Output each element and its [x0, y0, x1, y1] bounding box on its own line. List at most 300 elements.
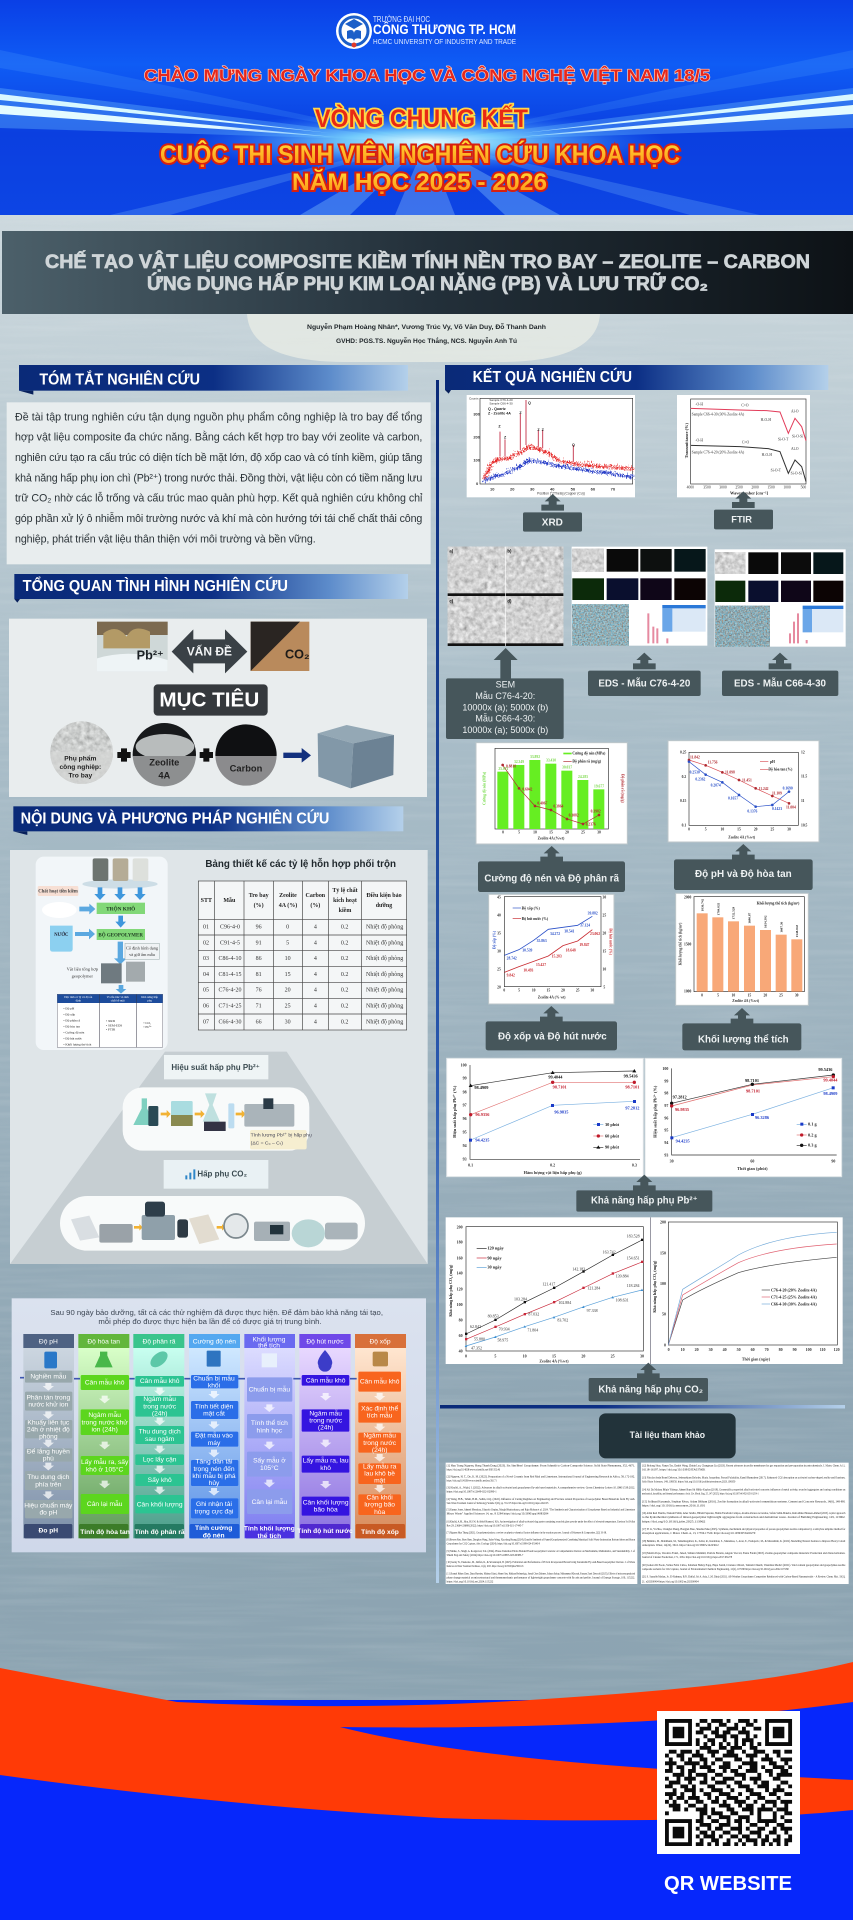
chart: CO2 adsorption versus zeolite: 5 [494, 1354, 496, 1359]
panel: test procedures: Sau 90 ngày bảo dưỡng, tất cả các thử nghiệm đã được thực hiện. Để đảm bảo khả năng tái tạo, [50, 1308, 383, 1317]
table: mix design: 66 [256, 1019, 262, 1025]
chart: CO2 adsorption versus zeolite: 58.975 [497, 1337, 508, 1342]
column: porosity: Tính độ xốp [361, 1528, 399, 1536]
chart: Pb adsorption versus time: 93 [664, 1152, 668, 1157]
chart: CO2 adsorption versus time: 100 [660, 1281, 666, 1286]
table: mix design: 4 [314, 940, 317, 946]
column: compressive strength: hủy [209, 1479, 220, 1487]
chart: porosity and absorption: 5 [603, 985, 605, 989]
column: disintegration: Lọc lấy cặn [143, 1455, 177, 1464]
column: pH [23, 1334, 74, 1538]
column: pH: đo pH [39, 1510, 57, 1517]
label: EDS C66-4-30: EDS - Mẫu C66-4-30 [734, 678, 826, 689]
chart: CO2 adsorption versus zeolite: 100 [457, 1302, 463, 1307]
column: compressive strength: Ghi nhận tải [196, 1501, 232, 1508]
references: left column: Res 29, 23664-23688 (2022). https://doi.org/10.1007/s11356-021-17445-7 [447, 1523, 524, 1528]
chart: XRD: Sample C66-4-30 [489, 402, 513, 406]
table: mix design: 06 [203, 1003, 209, 1009]
column: porosity [355, 1334, 406, 1538]
chart: CO2 adsorption versus time: C71-4-25 (25% Zeolite 4A) [771, 1294, 817, 1299]
chart: porosity and absorption: Độ xốp (%) [492, 930, 496, 949]
chart: strength and disintegration: 15 [549, 831, 553, 835]
chart: strength and disintegration: 10 [533, 831, 537, 835]
image: EDS C76-4-20 [572, 547, 707, 646]
flowchart: synthesis: • Độ hút nước [63, 1036, 83, 1040]
references: right column: https://doi.org/10.1016/j.cemconres.2016.11.001 [642, 1503, 706, 1507]
references: left column: [11] Samad Hokm Chen, Dana Hussien, Mahyar Kiani, Ahmet Sen, Hakkan Helmeolgu, Jamal Chen Dalmes, Sulyan Sahay, Mohammad Khosah, Farzam Zarei Davoodi (2025). Effects of microencapsulated [447, 1572, 635, 1577]
process: Pb adsorption [123, 1087, 312, 1151]
chart: CO2 adsorption versus zeolite: 25 [611, 1354, 615, 1359]
chart: CO2 adsorption versus zeolite: 140 [457, 1271, 463, 1276]
table: mix design: C76-4-20 [219, 988, 241, 994]
chart: pH and solubility: 11.004 [786, 805, 796, 809]
section divider [440, 1405, 845, 1408]
chart: pH and solubility: 5 [705, 828, 707, 832]
label: CO2 adsorption: Hấp phụ CO₂ [197, 1170, 247, 1179]
references: right column: 16118-16197. https://doi.org/10.1039/D3TA03760K [642, 1468, 706, 1472]
chart: pH and solubility: 0.25 [680, 750, 687, 754]
column: disintegration [133, 1334, 185, 1538]
column: compressive strength: độ nén [203, 1533, 225, 1540]
chart: FTIR: -O-H [695, 439, 703, 443]
table: mix design: 4 [314, 1019, 317, 1025]
chart: porosity and absorption: 9.842 [507, 974, 515, 978]
table: mix design: 02 [203, 940, 209, 946]
column: water absorption: khô [320, 1465, 331, 1472]
chart: strength and disintegration: Cường độ nén (MPa) [483, 771, 487, 805]
chart: CO2 adsorption versus zeolite: 80.853 [488, 1313, 499, 1318]
column: water absorption: Cân mẫu khô [306, 1375, 346, 1384]
chart: Pb adsorption versus time: 96 [664, 1115, 668, 1120]
table: mix design [198, 881, 407, 1030]
chart: Pb adsorption versus time: Hiệu suất hấp phụ Pb²⁺ (%) [653, 1085, 658, 1138]
column: solubility: ion (24h) [92, 1427, 118, 1434]
column: compressive strength: trọng cực đại [195, 1509, 234, 1516]
column: disintegration: sau ngâm [145, 1436, 175, 1443]
flowchart: synthesis: Vi cấu trúc và tính [107, 995, 129, 999]
chart: strength and disintegration: 32.349 [514, 760, 524, 764]
flowchart: synthesis: • Pb²⁺ [143, 1025, 152, 1029]
chart: Pb adsorption versus dose: 100 [461, 1062, 467, 1067]
chart: porosity and absorption: 15.427 [536, 963, 546, 967]
chart: porosity and absorption: 39.882 [588, 911, 598, 915]
label: SEM: 10000x (a); 5000x (b) [462, 725, 548, 735]
references: left column: Sulo Waste Treatment Journal of Technology Volume 3(10), pp. 716-725 https://doi.org/10.1016/j.jclepro.2022.05 [447, 1501, 549, 1506]
trapezoid backdrop [10, 1052, 428, 1264]
objective label: MỤC TIÊU [159, 687, 259, 711]
references: left column: https://doi.org/10.1007/s12649-022-02090-1 [447, 1490, 497, 1494]
chart: Pb adsorption versus dose: 60 phút [605, 1133, 620, 1138]
chart: strength and disintegration: 25 [581, 831, 585, 835]
column: bulk density: Tính thể tích [251, 1419, 288, 1427]
chart: pH and solubility: 0.2530 [690, 770, 700, 774]
chart: strength and disintegration: Zeolite 4A (%wt) [538, 837, 565, 841]
material: zeolite: 4A [158, 770, 171, 780]
chart: porosity and absorption: 30 [603, 895, 606, 899]
flowchart: synthesis: chất bề mặt [111, 998, 125, 1002]
chart: CO2 adsorption versus time: 120 [834, 1347, 840, 1352]
label: SEM: 10000x (a); 5000x (b) [462, 702, 548, 712]
chart: strength and disintegration: 0.3982 [591, 810, 601, 814]
column: disintegration: Cân mẫu khô [140, 1376, 180, 1385]
chart: Pb adsorption versus dose: 97 [463, 1103, 467, 1108]
column: pH: Thu dung dịch [27, 1474, 70, 1481]
chart: pH and solubility: Độ hòa tan (%) [768, 768, 793, 772]
chart: porosity and absorption: 30 [497, 950, 501, 954]
column: pH: nước khử ion [28, 1401, 69, 1409]
label: CO2 capacity: Khả năng hấp phụ CO₂ [598, 1384, 703, 1396]
chart: FTIR: C=O [741, 404, 749, 408]
column: disintegration: Cân khối lượng [137, 1499, 183, 1508]
chart: porosity and absorption: 5 [518, 989, 520, 993]
column: porosity: hòa [374, 1509, 386, 1516]
chart: CO2 adsorption versus time: 40 [723, 1347, 727, 1352]
chart: strength and disintegration: 30.037 [562, 766, 572, 770]
column: water absorption: Độ hút nước [306, 1338, 344, 1345]
table: mix design: 4A (%) [279, 902, 297, 909]
chart: XRD: 50 [571, 486, 576, 491]
column: compressive strength: mặt cắt [203, 1409, 225, 1418]
column: pH: Đo pH [39, 1527, 58, 1534]
label: pH [674, 859, 813, 890]
chart: FTIR: 2500 [735, 486, 743, 490]
chart: strength and disintegration: 0.2376 [586, 823, 596, 827]
material: fly ash: Tro bay [68, 772, 92, 779]
chart: bulk density: 1732.529 [732, 907, 736, 919]
chart: Pb adsorption versus time: 94.4235 [676, 1138, 690, 1143]
chart: Pb adsorption versus time: 98 [664, 1091, 668, 1096]
chart: strength and disintegration: 0.8818 [506, 764, 516, 768]
chart: strength and disintegration: 0.3864 [553, 804, 564, 808]
chart: bulk density: Zeolite 4A (%wt) [732, 999, 760, 1003]
column: disintegration: Tính độ phân rã [135, 1529, 185, 1536]
flowchart: synthesis: • Độ pH [63, 1006, 75, 1010]
column: compressive strength: Chuẩn bị mẫu [193, 1373, 235, 1382]
image: SEM micrographs: d) [507, 598, 512, 603]
arrow: to product [283, 748, 311, 763]
table: mix design: 0.2 [341, 956, 348, 962]
table: mix design: Tỷ lệ chất [332, 887, 358, 894]
chart: bulk density: 1607.36 [779, 922, 783, 933]
chart: CO2 adsorption versus time: Khả năng hấp phụ CO₂ (mg/g) [652, 1260, 657, 1313]
process: CO2 adsorption [60, 1196, 365, 1251]
title band: CHẾ TẠO VẬT LIỆU COMPOSITE KIỀM TÍNH NỀN TRO BAY – ZEOLITE – CARBON [45, 251, 810, 273]
right column top [445, 365, 846, 739]
chart: CO2 adsorption versus zeolite: 30 [640, 1354, 644, 1359]
chart: CO2 adsorption versus zeolite: 163.742 [603, 1249, 616, 1254]
references: left column: [1] Huu Trung Nguyen, Hong Thanh Dang (2023). Six Sim/Beer! Geopolymer: From Schmidt to Carbon-Composite Science. Solid State Phenomena, 352, 4671. [447, 1464, 635, 1469]
chart: CO2 adsorption versus time: 0 [668, 1347, 670, 1352]
references: left column [446, 1463, 637, 1584]
chart: strength and disintegration: Độ phân rã (mg/g) [572, 759, 602, 763]
chart: bulk density: 25 [779, 994, 783, 998]
chart: CO2 adsorption versus zeolite: 97.338 [587, 1308, 598, 1313]
material: zeolite [132, 722, 198, 788]
column: pH: Khuấy liên tục [27, 1417, 70, 1426]
chart: CO2 adsorption versus zeolite: 83.702 [557, 1318, 568, 1323]
label: EDS C66-4-30 [722, 671, 838, 696]
arrow: EDS C76-4-20 [633, 653, 656, 669]
flowchart: synthesis: • FTIR [106, 1027, 116, 1031]
label: CO2 capacity [589, 1378, 708, 1401]
chart: pH and solubility: 0.1423 [772, 807, 782, 811]
label: Pb capacity [576, 1190, 712, 1212]
references: right column: Solid State Sciences, 148, 108350. https://doi.org/10.1016/j.solidstatesciences.2023.108350 [642, 1479, 736, 1484]
chart: Pb adsorption versus dose: 0.2 [550, 1163, 555, 1168]
chart: strength and disintegration [476, 743, 627, 844]
table: mix design: 07 [203, 1019, 209, 1025]
flowchart: synthesis: • Độ hòa tan [63, 1024, 80, 1028]
material: zeolite: Zeolite [149, 757, 179, 767]
chart: strength and disintegration: 25.871 [498, 767, 509, 771]
chart: pH and solubility: 11.842 [690, 756, 700, 760]
references: left column: [7] Nguyen Huy Thang (2021). Geopolymerization: a review on physico-chemical factors influence in the reaction process. Journal of Polymers & Composites, 2(2) 33-38. [447, 1531, 607, 1536]
chart: Pb adsorption versus dose: Hàm lượng vật liệu hấp phụ (g) [524, 1170, 582, 1175]
chart: porosity and absorption: 25 [603, 914, 606, 918]
flowchart: synthesis: BỘ GEOPOLYMER [98, 932, 143, 938]
chart: XRD: Z [504, 436, 507, 440]
arrow: strength [540, 846, 563, 863]
column: bulk density: Chuẩn bị mẫu [249, 1384, 290, 1393]
logo: university: TRƯỜNG ĐẠI HỌC [373, 15, 430, 24]
material: fly ash: công nghiệp: [59, 764, 101, 771]
chart: CO2 adsorption versus time: C66-4-30 (30% Zeolite 4A) [771, 1301, 817, 1306]
table: mix design: 03 [203, 956, 209, 962]
chart: XRD: 200 [473, 434, 481, 439]
references: left column: [2] Nguyen, H. T., Do, K. M. (2022). Preparation of a Novel Ceramic from Red Mud and Limestone. International Journal of Engineering Research in Africa, 58, 172-182. [447, 1474, 635, 1479]
chart: Pb adsorption versus time: 99.5436 [818, 1067, 833, 1072]
table: mix design: kích hoạt [333, 898, 357, 904]
label: SEM: Mẫu C76-4-20: [475, 691, 535, 701]
column: compressive strength: Cường độ nén [193, 1338, 236, 1345]
chart: CO2 adsorption versus zeolite: 0 [465, 1354, 467, 1359]
chart: CO2 adsorption versus zeolite: 55.880 [474, 1337, 485, 1342]
chart: Pb adsorption versus time: 98.4909 [823, 1091, 837, 1096]
chart: bulk density: 1654.392 [764, 915, 768, 928]
table: mix design: 04 [203, 972, 209, 978]
references: left column: phase change material on microstructural and thermomechanic performance of lightweight geopolymer concrete with fly ash and perlite. Journal of Energy Storage, 100, 115222. [447, 1576, 635, 1581]
column: pH: Nghiền mẫu [30, 1372, 67, 1381]
chart: Pb adsorption versus time: 100 [662, 1066, 668, 1071]
chart: CO2 adsorption versus zeolite: 15 [552, 1354, 556, 1359]
chart: pH and solubility: 11.5 [801, 775, 807, 779]
column: porosity: mặt [374, 1478, 385, 1485]
title band [2, 231, 853, 314]
column: porosity: lau khô bề [364, 1469, 395, 1478]
chart: porosity and absorption: 20 [561, 989, 565, 993]
chart: XRD: Z [519, 411, 522, 415]
material: fly ash: Phụ phẩm [64, 754, 96, 762]
chart: CO2 adsorption versus time: 70 [765, 1347, 769, 1352]
chart: bulk density: Khối lượng thể tích (kg/m³) [678, 922, 683, 965]
chart: porosity and absorption: 18.648 [566, 948, 576, 952]
chart: XRD: Z [498, 424, 501, 428]
chart: FTIR: -O-H [695, 402, 703, 406]
chart: pH and solubility: 11.756 [708, 760, 718, 764]
column: porosity: tích mẫu [367, 1411, 393, 1420]
chart: strength and disintegration: 0 [502, 831, 504, 835]
chart: Pb adsorption versus dose: 0.3 [632, 1163, 637, 1168]
chart: Pb adsorption versus time: 0.1 g [808, 1122, 817, 1127]
column: bulk density: Tính khối lượng [244, 1525, 295, 1533]
column: solubility: khô ở 105°C [86, 1465, 124, 1473]
flowchart: synthesis: phụ [147, 998, 152, 1002]
table: mix design: C86-4-10 [219, 956, 241, 962]
chart: Pb adsorption versus time: 98.7101 [745, 1078, 759, 1083]
chart: CO2 adsorption versus zeolite: 180 [457, 1240, 463, 1245]
chart: CO2 adsorption versus zeolite: 160 [457, 1255, 463, 1260]
chart: strength and disintegration: 19.677 [594, 784, 604, 788]
chart: FTIR: Al-O [791, 410, 799, 414]
references: right column: 21. e202300404 https://doi.org/10.1002/en.202300404 [642, 1580, 699, 1584]
column: water absorption: (24h) [318, 1425, 333, 1432]
panel: abstract: góp phần xử lý ô nhiễm môi trường nước và khí mà còn hướng tới tái chế chất thải công [15, 512, 422, 525]
table: mix design: (%) [254, 902, 264, 909]
chart: Pb adsorption versus dose: 0.1 [468, 1163, 473, 1168]
chart: CO2 adsorption versus zeolite: 40 [459, 1348, 463, 1353]
chart: XRD [467, 395, 635, 497]
flowchart: synthesis: và giữ ẩm mẫu [129, 952, 156, 957]
chart: Pb adsorption versus dose: 93 [463, 1157, 467, 1162]
logo: university: HCMC UNIVERSITY OF INDUSTRY AND TRADE [373, 37, 516, 46]
references: left column: [3] Khalid, A., Wajid, I. (2022). Advances in alkali-activated and geopolymer fly-ash based materials: A comprehensive review. Green Chemistry Letters 10.1080/1539.2022. [447, 1486, 635, 1491]
column: solubility: Lấy mẫu ra, sấy [81, 1457, 129, 1466]
process: Pb adsorption: (ΔC = C₀ – Cₜ) [251, 1141, 283, 1147]
chart: porosity and absorption: 15 [603, 950, 606, 954]
banner heading: contest: CUỘC THI SINH VIÊN NGHIÊN CỨU KHOA HỌC [160, 139, 680, 169]
chart: strength and disintegration: 0.4067 [537, 802, 548, 806]
column: compressive strength: khi mẫu bị phá [192, 1471, 236, 1480]
label: strength: Cường độ nén và Độ phân rã [484, 873, 619, 884]
column: solubility: Cân lại mẫu [87, 1499, 123, 1508]
references: left column: [4] Wang, H.B., Tahsh, B.M., Sahin, O.Q. (2022). Influence of Curing Regimes on Engineering and Fracture related Properties of Geopolymer Based Materials from Fly Ash. [447, 1497, 635, 1502]
label: Pb adsorption efficiency: Hiệu suất hấp phụ Pb²⁺ [171, 1063, 260, 1072]
references: right column [641, 1463, 849, 1584]
flowchart: synthesis: • Khối lượng thể tích [63, 1041, 92, 1046]
chart: strength and disintegration: Cường độ nén (MPa) [572, 752, 606, 756]
table: mix design: (%) [310, 902, 320, 909]
label: FTIR: FTIR [731, 514, 752, 524]
column: compressive strength: Đặt mẫu vào [195, 1431, 233, 1440]
chart: XRD: Sample C76-4-20 [489, 398, 513, 402]
chart: bulk density: 0 [701, 994, 703, 998]
table: mix design: 0.2 [341, 988, 348, 994]
flowchart: synthesis: TRỘN KHÔ [106, 904, 135, 912]
image: Pb polluted water: Pb²⁺ [137, 648, 164, 662]
heading: research summary: TÓM TẮT NGHIÊN CỨU [39, 370, 200, 389]
arrow: FTIR [732, 491, 755, 508]
references: left column: [9] Niniko, S., Singh, A. & Agarwal, S.K. (2024). Phase-Transition Fabric-Bonded Fused Geopolymer Concrete: A Comprehensive Review on Mechanisms, Mathematics, and Sustainability. J. of [447, 1549, 636, 1554]
right column adsorption charts [446, 1058, 843, 1401]
chart: FTIR: Si-O-Si [791, 472, 802, 476]
chart: strength and disintegration: 33.430 [546, 759, 556, 763]
arrow: EDS C66-4-30 [769, 653, 791, 669]
column: disintegration: Sấy khô [148, 1475, 172, 1484]
process: Pb adsorption: Tính lượng Pb²⁺ bị hấp phụ [251, 1133, 312, 1139]
chart: CO2 adsorption versus zeolite: 103.284 [514, 1297, 527, 1302]
chart: Pb adsorption versus dose: 98 [463, 1089, 467, 1094]
chart: porosity and absorption: 20 [603, 932, 606, 936]
chart: CO2 adsorption versus time: 10 [681, 1347, 685, 1352]
logo: university [336, 13, 516, 49]
heading: research overview: TỔNG QUAN TÌNH HÌNH NGHIÊN CỨU [23, 576, 288, 595]
flowchart: synthesis: • XRD [106, 1019, 116, 1023]
chart: Pb adsorption versus time [645, 1058, 842, 1177]
chart: bulk density: 15 [748, 994, 751, 998]
chart: pH and solubility: pH [770, 760, 775, 764]
chart: CO2 adsorption versus zeolite: 121.284 [587, 1286, 600, 1291]
flowchart: synthesis: geopolymer [72, 973, 94, 978]
chart: porosity and absorption: 38.541 [564, 929, 575, 933]
QR caption: QR WEBSITE [664, 1873, 792, 1895]
chart: pH and solubility: 11 [801, 799, 805, 803]
table: mix design: 15 [285, 972, 291, 978]
header banner [0, 0, 853, 215]
chart: CO2 adsorption versus time: 20 [695, 1347, 699, 1352]
logo: university: CÔNG THƯƠNG TP. HCM [373, 22, 516, 37]
chart: CO2 adsorption versus zeolite: 154.651 [627, 1255, 640, 1260]
material: carbon [213, 723, 280, 787]
chart: XRD: 40 [550, 486, 555, 491]
chart: bulk density: 20 [764, 994, 767, 998]
arrow: XRD [541, 494, 564, 511]
chart: Pb adsorption versus time: 96.9835 [675, 1107, 689, 1112]
chart: CO2 adsorption versus time: 0 [664, 1342, 666, 1347]
image: SEM micrographs: b) [507, 548, 512, 553]
flowchart: synthesis: định [76, 998, 81, 1002]
chart: FTIR: 3500 [703, 486, 711, 490]
chart: porosity and absorption: 10.493 [523, 968, 534, 972]
chart: Pb adsorption versus dose: 97.2812 [625, 1105, 639, 1110]
table: mix design: Nhiệt độ phòng [366, 1019, 403, 1025]
chart: Pb adsorption versus dose: 98.7101 [553, 1084, 567, 1089]
column: bulk density: Sấy mẫu ở [253, 1456, 286, 1465]
chart: pH and solubility: 20 [754, 828, 758, 832]
table: mix design: C96-4-0 [220, 925, 240, 931]
column: compressive strength: Tăng dần tải [195, 1457, 233, 1466]
chart: CO2 adsorption versus zeolite: Khả năng hấp phụ CO₂ (mg/g) [448, 1264, 453, 1317]
chart: FTIR: 2000 [751, 486, 759, 490]
banner heading: academic year: NĂM HỌC 2025 - 2026 [292, 168, 547, 196]
column: compressive strength: trọng nén đến [193, 1464, 235, 1473]
column: compressive strength: khối [208, 1380, 221, 1389]
banner heading: celebration: CHÀO MỪNG NGÀY KHOA HỌC VÀ CÔNG NGHỆ VIỆT NAM 18/5 [144, 66, 710, 85]
panel: test procedures: mỗi phép đo được thực hiện ba lần để có được giá trị trung bình. [98, 1317, 322, 1326]
bottom wave band [0, 1662, 853, 1920]
chart: bulk density: 1784.835 [716, 903, 720, 915]
image: composite cube [318, 725, 394, 788]
chart: Pb adsorption versus time: 0.3 g [808, 1143, 817, 1148]
chart: XRD: Z - Zeolite 4A [488, 411, 511, 415]
chart: pH and solubility: 11.109 [772, 792, 782, 796]
table: mix design: Nhiệt độ phòng [366, 1003, 403, 1009]
chart: XRD: Position [°2Theta] (Copper (Cu)) [537, 492, 585, 496]
column: water absorption: bão hòa [314, 1507, 338, 1514]
chart: CO2 adsorption versus time: Thời gian (ngày) [742, 1356, 771, 1361]
column: water absorption: Tính độ hút nước [297, 1528, 353, 1535]
chart: CO2 adsorption versus zeolite: 183.528 [627, 1234, 640, 1239]
chart: Pb adsorption versus time: 97 [664, 1103, 668, 1108]
chart: porosity and absorption: Độ hút nước (%) [522, 917, 549, 921]
references: left column: https://doi.org/10.4028/www.scientific.net/jera.58.171 [447, 1478, 497, 1482]
chart: CO2 adsorption versus zeolite: 139.884 [616, 1273, 629, 1278]
chart: FTIR: H-O-H [761, 418, 771, 422]
chart: Pb adsorption versus dose: Hiệu suất hấp phụ Pb²⁺ (%) [452, 1085, 457, 1138]
chart: XRD: 20 [510, 486, 515, 491]
title band: ỨNG DỤNG HẤP PHỤ KIM LOẠI NẶNG (PB) VÀ LƯU TRỮ CO₂ [147, 273, 708, 295]
table: mix design: 4 [314, 956, 317, 962]
panel: abstract: hợp vật liệu composite đa chức năng. Bằng cách kết hợp tro bay với zeolite và carbon, [15, 431, 422, 444]
